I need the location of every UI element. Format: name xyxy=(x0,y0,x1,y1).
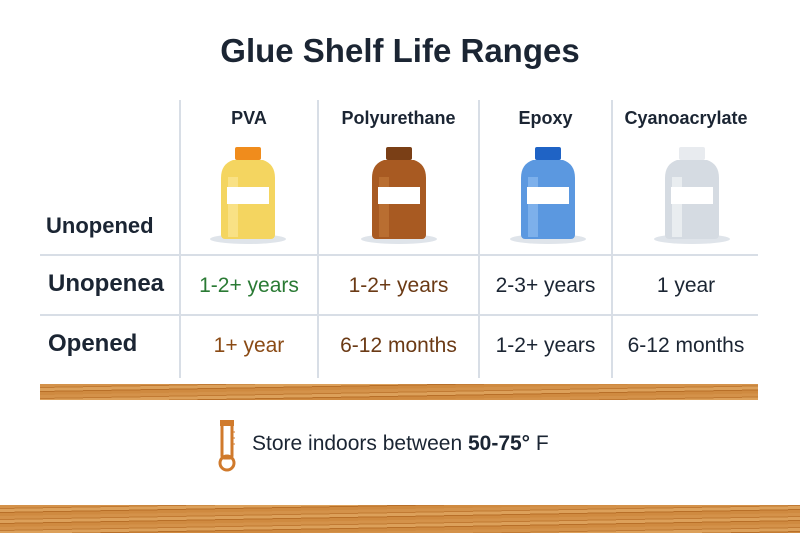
row: unopened values: 1-2+ years xyxy=(199,274,299,297)
row: opened values: 1+ year xyxy=(214,334,284,357)
row: unopened values: 1-2+ years xyxy=(349,274,448,297)
column headers xyxy=(231,108,748,128)
row: opened values xyxy=(214,334,744,357)
bottles xyxy=(210,147,730,244)
column headers: PVA xyxy=(231,108,267,128)
column headers: Cyanoacrylate xyxy=(624,108,748,128)
row: opened values: 6-12 months xyxy=(628,334,744,357)
icon: Polyurethane bottle xyxy=(361,147,437,244)
row labels: Opened xyxy=(48,330,137,357)
storage note: Store indoors between 50-75° F xyxy=(252,432,549,455)
wood shelf xyxy=(40,384,758,400)
wood floor xyxy=(0,505,800,533)
icon: PVA bottle xyxy=(210,147,286,244)
row labels: Unopened xyxy=(46,213,154,238)
row labels xyxy=(46,213,164,357)
title: Glue Shelf Life Ranges xyxy=(220,32,580,69)
icon: Cyanoacrylate bottle xyxy=(654,147,730,244)
icon: thermometer xyxy=(218,420,236,472)
row labels: Unopenea xyxy=(48,270,164,297)
column headers: Epoxy xyxy=(518,108,573,128)
row: opened values: 1-2+ years xyxy=(496,334,595,357)
row: unopened values: 1 year xyxy=(657,274,715,297)
icon: Epoxy bottle xyxy=(510,147,586,244)
storage note xyxy=(218,420,549,472)
row: unopened values xyxy=(199,274,715,297)
column headers: Polyurethane xyxy=(341,108,456,128)
row: opened values: 6-12 months xyxy=(340,334,457,357)
row: unopened values: 2-3+ years xyxy=(496,274,595,297)
table grid xyxy=(40,100,758,378)
